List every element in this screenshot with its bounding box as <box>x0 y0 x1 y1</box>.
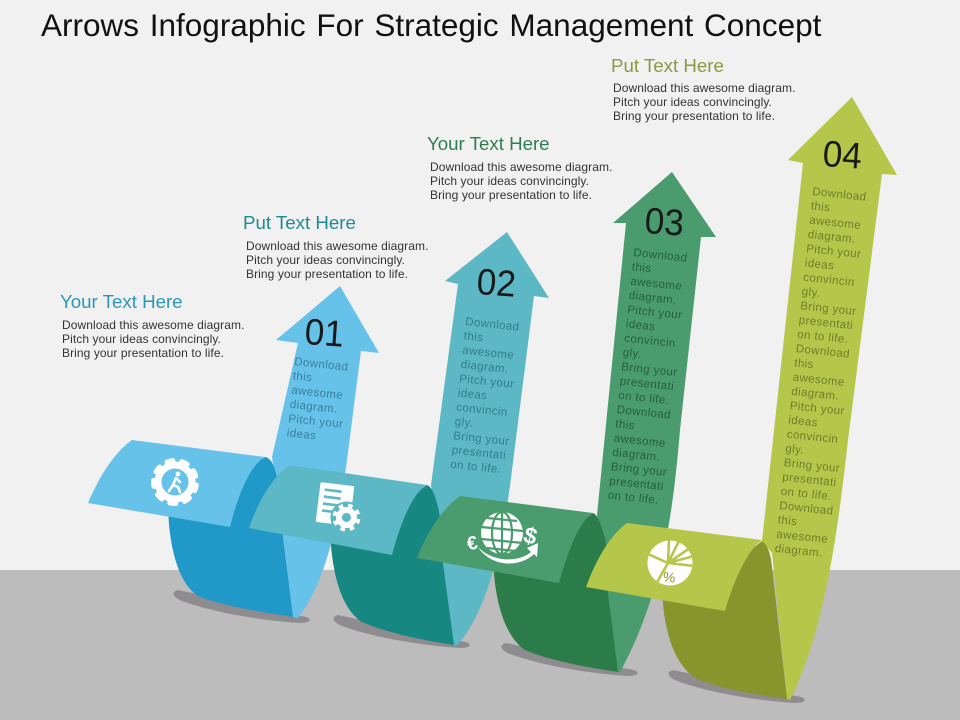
arrow 3 text: Download <box>616 404 671 422</box>
arrow 4 text: this <box>794 357 814 371</box>
arrow 4 text: Bring your <box>783 457 841 475</box>
number 01: 01 <box>303 310 345 355</box>
arrow 4 text: convincin <box>786 429 839 446</box>
caption 1 body: Pitch your ideas convincingly. <box>62 332 221 346</box>
arrow 1 text: diagram. <box>289 399 338 416</box>
arrow 4 text: on to life. <box>797 329 849 346</box>
arrow 2 text: ideas <box>457 387 488 402</box>
floor <box>0 570 960 720</box>
arrow 4 text: presentati <box>798 314 854 332</box>
arrow 4 text: Download <box>779 500 834 518</box>
arrow 4 band <box>586 523 762 611</box>
arrow 02 <box>249 232 549 648</box>
arrow 2 text: convincin <box>456 402 508 419</box>
caption 4 body: Pitch your ideas convincingly. <box>613 95 772 109</box>
arrow 4 text: awesome <box>809 215 862 232</box>
caption 3 heading: Your Text Here <box>427 133 550 154</box>
arrow 1 shaft and head <box>272 286 379 618</box>
arrow 4 text: diagram. <box>791 386 840 403</box>
arrow 4 text: awesome <box>776 529 829 546</box>
caption 2 <box>243 212 428 281</box>
arrow 4 shaft and head <box>762 97 897 700</box>
arrow 3 text: Bring your <box>610 461 668 479</box>
arrow 3 text: Bring your <box>621 361 678 379</box>
arrow 4 text: gly. <box>785 443 804 457</box>
arrow 4 text: this <box>777 514 798 528</box>
arrow 3 text: presentati <box>619 375 675 393</box>
caption 4 body <box>613 81 796 123</box>
caption 1 body: Download this awesome diagram. <box>62 318 244 332</box>
arrow 3 text: awesome <box>613 433 666 450</box>
arrow 2 text: on to life. <box>450 459 502 476</box>
arrow 3 text: this <box>631 261 652 275</box>
arrow 3 text: Download <box>633 247 688 265</box>
arrow 3 curl inner <box>493 513 618 672</box>
arrow 04 <box>586 97 897 703</box>
icon: document with gear <box>315 482 366 535</box>
number 03: 03 <box>643 199 685 244</box>
arrow 3 text: Pitch your <box>627 304 683 322</box>
arrow 3 text: on to life. <box>607 490 659 507</box>
shadow 2 <box>333 615 470 648</box>
arrow 4 text: diagram. <box>774 543 823 560</box>
arrow 4 text: on to life. <box>780 486 832 503</box>
caption 1 body <box>62 318 244 360</box>
caption 3 <box>427 133 612 202</box>
number 02: 02 <box>475 260 517 305</box>
euro sign: € <box>465 533 480 555</box>
arrow 3 text: on to life. <box>618 390 670 407</box>
caption 4 <box>611 55 796 123</box>
dollar sign: $ <box>521 521 540 550</box>
caption 2 body: Pitch your ideas convincingly. <box>246 253 405 267</box>
arrow 2 band <box>249 466 427 555</box>
arrow 2 curl inner <box>330 485 454 645</box>
arrow 4 text: gly. <box>801 286 821 300</box>
arrow 2 text: diagram. <box>460 359 509 376</box>
arrow 2 text: Download <box>465 316 520 334</box>
arrow 1 text: ideas <box>286 427 317 442</box>
shadow 4 <box>668 670 805 703</box>
arrow 4 text: Bring your <box>800 300 857 318</box>
arrow 1 text: Download <box>294 356 349 374</box>
caption 1 heading: Your Text Here <box>60 291 183 312</box>
caption 3 body: Bring your presentation to life. <box>430 188 592 202</box>
arrow 1 text: Pitch your <box>288 413 344 431</box>
arrow 1 curl inner <box>168 457 293 617</box>
caption 3 body: Pitch your ideas convincingly. <box>430 174 589 188</box>
title: Arrows Infographic For Strategic Management Concept <box>41 7 821 43</box>
arrow 4 curl inner <box>662 541 787 699</box>
arrow 2 text: awesome <box>462 345 515 362</box>
caption 4 body: Download this awesome diagram. <box>613 81 796 95</box>
arrow 4 text: convincin <box>803 272 855 289</box>
arrow 3 text: this <box>615 418 635 432</box>
percent sign: % <box>662 568 677 586</box>
arrow 3 band <box>417 496 593 583</box>
shadow 3 <box>501 643 638 676</box>
caption 2 body <box>246 239 428 281</box>
arrow 1 text: awesome <box>291 385 344 402</box>
arrow 2 text: this <box>463 330 484 344</box>
arrow 4 text: this <box>810 200 831 214</box>
icon: gear with walker <box>151 458 199 506</box>
arrow 03 <box>417 172 716 676</box>
shadow 1 <box>173 590 310 623</box>
arrow 2 text: Bring your <box>453 430 510 448</box>
arrow 3 shaft and head <box>597 172 716 672</box>
arrow 4 text: Download <box>795 343 850 361</box>
arrow 2 text: presentati <box>451 444 507 462</box>
arrow 1 text: this <box>292 370 313 384</box>
arrow 01 <box>88 286 379 623</box>
arrow 2 text: Pitch your <box>459 373 515 391</box>
arrow 4 text: Download <box>812 186 867 204</box>
arrow 3 text: diagram. <box>612 447 661 464</box>
arrow 2 shaft and head <box>431 232 549 645</box>
arrow 4 text: diagram. <box>807 229 856 246</box>
caption 3 body <box>430 160 612 202</box>
arrow 4 text: ideas <box>788 414 818 429</box>
arrow 3 text: awesome <box>630 276 683 293</box>
caption 4 heading: Put Text Here <box>611 55 724 76</box>
icon: globe with currency <box>465 512 542 569</box>
arrow 3 text: gly. <box>622 347 642 361</box>
icon: percentage pie <box>648 539 694 586</box>
arrow 1 band <box>88 440 265 527</box>
arrow 2 text: gly. <box>454 416 474 430</box>
caption 4 body: Bring your presentation to life. <box>613 109 775 123</box>
caption 2 body: Bring your presentation to life. <box>246 267 408 281</box>
caption 1 body: Bring your presentation to life. <box>62 346 224 360</box>
arrow 3 text: diagram. <box>628 290 677 307</box>
caption 3 body: Download this awesome diagram. <box>430 160 612 174</box>
caption 2 heading: Put Text Here <box>243 212 356 233</box>
arrow 4 text: ideas <box>804 257 835 272</box>
arrow 4 text: Pitch your <box>789 400 845 418</box>
caption 2 body: Download this awesome diagram. <box>246 239 428 253</box>
arrow 4 text: awesome <box>792 372 845 389</box>
arrow 3 text: presentati <box>609 475 664 493</box>
arrow 4 text: Pitch your <box>806 243 862 261</box>
arrow 4 text: presentati <box>782 471 837 489</box>
caption 1 <box>60 291 244 360</box>
number 04: 04 <box>821 132 863 177</box>
arrow 3 text: ideas <box>625 318 656 333</box>
arrow 3 text: convincin <box>624 333 676 350</box>
